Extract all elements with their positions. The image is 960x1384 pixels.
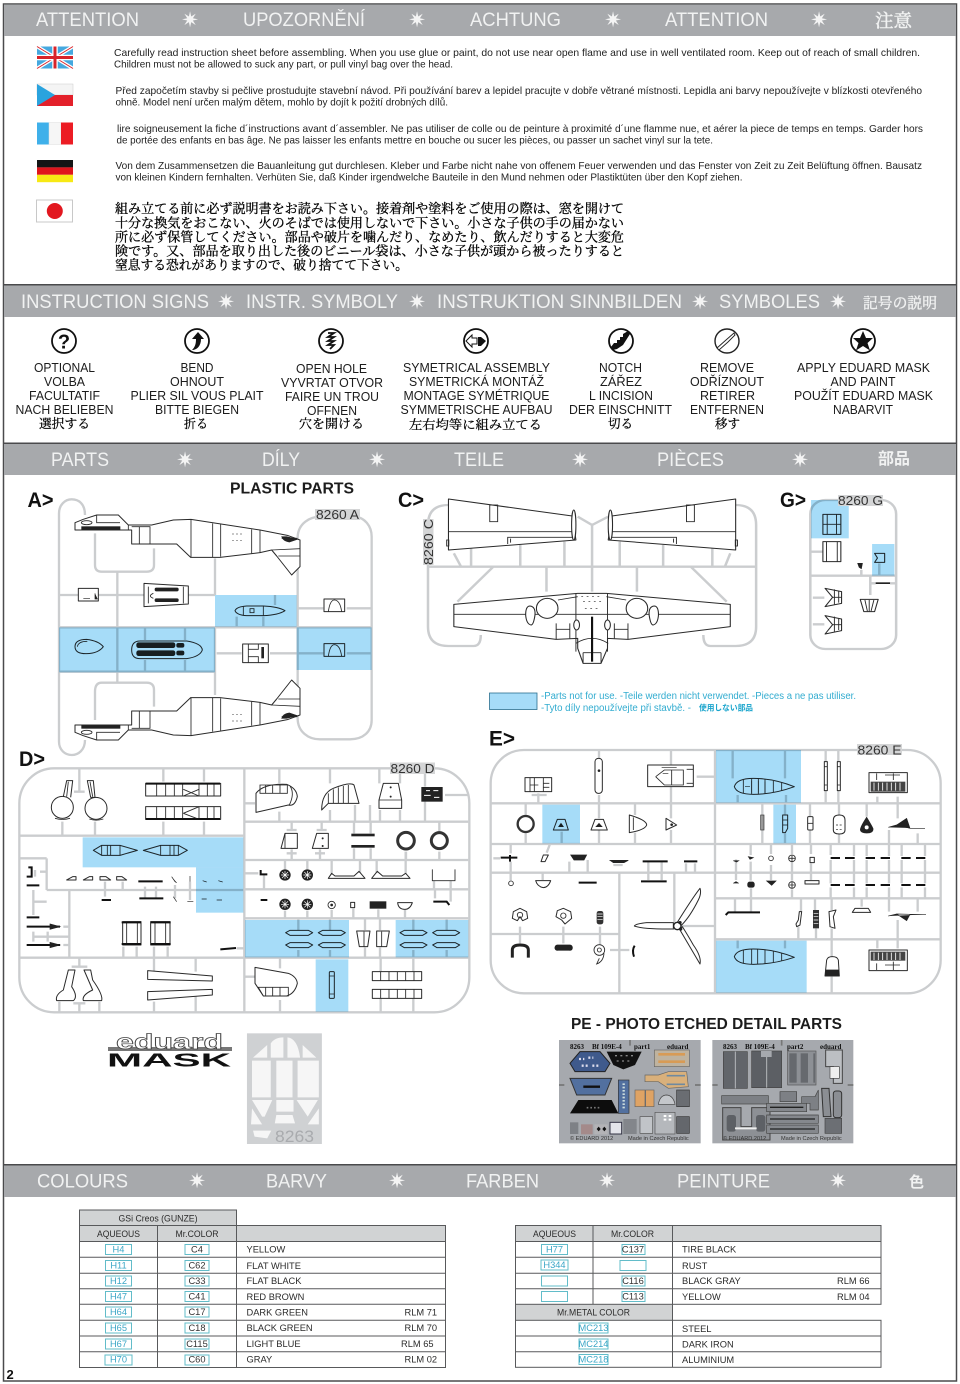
part: ring (518, 816, 534, 832)
fret 2 title: Bf 109E-4 (745, 1043, 775, 1051)
text block: French: de portée des enfants en bas âge. Ne pas laisser les enfants mettre en bouche ou sucer les pièces, ou passer un sachet vinyl sur la tete. (116, 136, 713, 146)
fret 2 footer: © EDUARD 2012 (723, 1135, 766, 1142)
text block: German: von kleinen Kindern fernhalten. Verhüten Sie, daß Kinder irgendwelche Bauteile in den Mund nehmen oder Plastiktüten über den Kopf ziehen. (116, 172, 742, 184)
icon: Czech flag (37, 84, 73, 106)
row: flat black (106, 1276, 302, 1286)
icon: question mark: ? (58, 332, 70, 354)
heading: colours band (4, 1164, 956, 1197)
sign: optional: NACH BELIEBEN (16, 402, 114, 417)
row: tire black (542, 1244, 737, 1254)
text block: Japanese: 窒息する恐れがありますので、破り捨てて下さい。 (115, 254, 408, 274)
sign: notch: 切る (608, 414, 633, 432)
sign: apply mask: NABARVIT (833, 402, 893, 417)
heading: attention band (4, 4, 956, 36)
sign: bend: PLIER SIL VOUS PLAIT (130, 388, 264, 403)
heading: parts band: TEILE (454, 450, 504, 471)
part: double bulb (555, 945, 572, 950)
logo: eduard mask: eduard (116, 1031, 223, 1054)
label: sprue G: G> (780, 489, 806, 512)
part: seat back (825, 957, 839, 976)
sign: remove: ODŘÍZNOUT (690, 374, 764, 389)
highlight: unused parts D (83, 837, 468, 1012)
heading: parts band: ✷ (571, 448, 589, 472)
table: paints left: AQUEOUS (97, 1229, 140, 1239)
label: 8260 E: 8260 E (858, 742, 902, 758)
icon: symmetry arrow (464, 329, 488, 353)
heading: parts band: PARTS (51, 450, 109, 471)
row: yellow: C113 (622, 1292, 644, 1302)
label: 8260 A: 8260 A (316, 507, 359, 522)
heading: attention band: ✷ (181, 8, 199, 32)
row: yellow (542, 1292, 870, 1302)
heading: colours band: ✷ (829, 1169, 847, 1193)
heading: parts band: ✷ (176, 448, 194, 472)
legend: parts not for use: 使用しない部品 (699, 702, 753, 714)
row: light blue (106, 1339, 434, 1349)
row: yellow: YELLOW (682, 1292, 721, 1302)
fret 1 title: Bf 109E-4 (592, 1043, 622, 1051)
heading: parts band: DÍLY (262, 450, 300, 471)
row: red brown: H47 (110, 1292, 127, 1302)
heading: photo etched parts: PE - PHOTO ETCHED DETAIL PARTS (571, 1016, 842, 1033)
part: small box (78, 588, 98, 601)
logo: eduard mask: MASK (107, 1050, 231, 1070)
photo etched fret 1 (559, 1040, 701, 1143)
diagram: sprue A (59, 499, 372, 755)
row: black gray: BLACK GRAY (682, 1276, 741, 1286)
label: 8260 D: 8260 D (390, 761, 434, 776)
part: small items left (27, 867, 223, 948)
part: rudder upper (256, 784, 297, 812)
part: seat left (51, 781, 73, 819)
sign: apply mask: POUŽÍT EDUARD MASK (794, 388, 933, 403)
part: small items right (261, 869, 455, 909)
text block: English: Children must not be allowed to suck any part, or pull vinyl bag over the head. (114, 60, 453, 70)
part: oval (75, 639, 103, 654)
row: black green: H65 (110, 1323, 127, 1333)
row: tire black: TIRE BLACK (682, 1244, 737, 1254)
row: flat black: FLAT BLACK (246, 1276, 302, 1286)
row: yellow: RLM 04 (837, 1292, 870, 1302)
heading: parts band: 部品 (878, 445, 910, 469)
icon: star (851, 329, 875, 353)
text block: Japanese: 険です。又、部品を取り出した後のビニール袋は、小さな子供が頭から被ったりすると (115, 240, 624, 260)
part: rods (824, 762, 840, 791)
part: nine-shaped (594, 945, 605, 964)
heading: instruction signs band (4, 284, 956, 317)
row: rust: RUST (682, 1261, 708, 1271)
row: flat white: FLAT WHITE (246, 1261, 301, 1271)
row: steel: STEEL (682, 1324, 711, 1334)
table: paints left: GSi Creos (GUNZE) (118, 1214, 198, 1224)
part: exhaust block (144, 583, 188, 607)
sign: remove: ENTFERNEN (690, 402, 764, 417)
part: dashes (831, 858, 925, 885)
part: row two right (761, 815, 925, 834)
panel: instruction signs (4, 284, 956, 433)
part: curved panel (322, 784, 359, 810)
part: upper fuselage (75, 515, 300, 575)
mask sheet: 8263 (275, 1127, 314, 1146)
label: sprue D: D> (19, 748, 45, 771)
row: gray (105, 1354, 437, 1365)
label: sprue A: A> (28, 489, 54, 512)
fret 1 footer: © EDUARD 2012 (570, 1135, 613, 1142)
sign: symmetrical assembly: MONTAGE SYMÉTRIQUE (404, 388, 550, 403)
sign: symmetrical assembly (400, 329, 552, 433)
heading: instruction signs band: ✷ (217, 290, 235, 314)
sign: remove: RETIRER (700, 388, 755, 403)
fret 2 title: 8263 (723, 1043, 738, 1051)
row: red brown: RED BROWN (246, 1292, 304, 1302)
row: dark green: DARK GREEN (246, 1308, 308, 1318)
row: metal heading: Mr.METAL COLOR (557, 1308, 630, 1318)
sign: notch: NOTCH (599, 360, 642, 375)
panel: attention (4, 4, 956, 274)
row: light blue: RLM 65 (401, 1339, 434, 1349)
part: blue tube (329, 972, 334, 998)
sign: optional: OPTIONAL (34, 360, 95, 375)
heading: attention band: ✷ (810, 8, 828, 32)
part: wheels (279, 869, 313, 910)
legend: parts not for use: -Tyto díly nepoužívejte při stavbě. - (541, 703, 691, 714)
row: aluminium (579, 1354, 734, 1365)
sign: open hole: 穴を開ける (299, 414, 364, 432)
part: black bar (876, 583, 890, 584)
heading: instruction signs band: INSTRUKTION SINNBILDEN (437, 292, 682, 313)
photo etched fret 2 (712, 1040, 853, 1143)
icon: drill (319, 329, 343, 353)
logo: eduard mask (107, 1031, 232, 1070)
row: flat white: H11 (110, 1260, 127, 1270)
sign: open hole (281, 329, 383, 432)
sign: remove (690, 329, 764, 432)
heading: colours band: PEINTURE (677, 1172, 770, 1192)
diagram: sprue C (428, 499, 896, 663)
table: paints left (80, 1210, 446, 1368)
heading: colours band: ✷ (388, 1169, 406, 1193)
heading: attention band: ATTENTION (36, 10, 139, 31)
row: yellow (106, 1244, 285, 1254)
diagram: sprue G (810, 500, 896, 649)
part: wing spar upper (146, 783, 221, 796)
icon: bend arrow (185, 329, 209, 353)
part: D shapes (629, 815, 677, 833)
part: lower fuselage (75, 680, 300, 740)
fret 2 title: eduard (820, 1043, 842, 1051)
sign: open hole: OPEN HOLE (296, 361, 367, 376)
row: yellow: H4 (113, 1244, 124, 1254)
sign: notch (569, 329, 672, 432)
sign: apply mask: AND PAINT (830, 374, 896, 389)
sign: symmetrical assembly: SYMETRICKÁ MONTÁŽ (409, 374, 544, 389)
row: tire black: C137 (622, 1244, 644, 1254)
sign: optional: VOLBA (44, 374, 85, 389)
icon: UK flag (37, 46, 73, 68)
table: paints left: Mr.COLOR (176, 1229, 219, 1239)
part: bracket (633, 946, 635, 957)
part: right wing upper (608, 499, 737, 550)
row: steel (579, 1323, 711, 1334)
sign: optional: 選択する (39, 414, 90, 432)
text block: English: Carefully read instruction sheet before assembling. When you use glue or paint, do not use near open flame and use in well ventilated room. Keep out of reach of small children. (114, 48, 920, 59)
row: gray: GRAY (246, 1354, 272, 1364)
part: tapered pieces (357, 931, 389, 947)
row: gray: RLM 02 (404, 1354, 437, 1364)
text block: Japanese: 組み立てる前に必ず説明書をお読み下さい。接着剤や塗料をご使用の際は、窓を開けて (115, 198, 624, 217)
part: lower wing (454, 593, 730, 663)
part: spinner blue (734, 778, 794, 794)
part: lower seats (56, 970, 102, 1001)
part: row five right (726, 908, 926, 928)
sign: bend: BEND (180, 360, 214, 375)
row: dark green: RLM 71 (404, 1308, 437, 1318)
part: panel with dots (379, 783, 402, 808)
row: yellow: C4 (191, 1244, 203, 1254)
row: dark iron: MC214 (579, 1339, 608, 1349)
text block: Czech: ohně. Model není určen malým dětem, mohlo by dojít k požití drobných dílů. (116, 96, 448, 108)
row: red brown: C41 (188, 1292, 206, 1302)
sign: symmetrical assembly: SYMMETRISCHE AUFBAU (400, 402, 552, 417)
icon: French flag (37, 122, 73, 144)
sign: bend: BITTE BIEGEN (155, 402, 239, 417)
sign: symmetrical assembly: SYMETRICAL ASSEMBLY (403, 360, 550, 375)
heading: attention band: ACHTUNG (470, 10, 561, 31)
part: blue noses (93, 845, 187, 855)
panel: colours (4, 1164, 956, 1368)
heading: instruction signs band: 記号の説明 (863, 292, 937, 313)
fret 1 title: part1 (634, 1043, 651, 1051)
diagram: sprue E (491, 750, 941, 993)
row: black green: RLM 70 (404, 1323, 437, 1333)
fret 1 title: 8263 (570, 1043, 584, 1051)
icon: notch (609, 329, 633, 353)
sign: open hole: OFFNEN (307, 403, 357, 418)
part: spinner lower (734, 949, 794, 964)
part: engine lower (869, 950, 907, 971)
row: dark green (106, 1307, 437, 1318)
fret 1 footer: Made in Czech Republic (628, 1136, 689, 1142)
heading: attention band: UPOZORNĚNÍ (243, 9, 366, 31)
heading: instruction signs band: SYMBOLES (719, 292, 820, 313)
part: basket (860, 599, 878, 612)
label: 8260 C: 8260 C (421, 519, 436, 565)
legend: parts not for use: -Parts not for use. -Teile werden nicht verwendet. -Pieces a ne pas utiliser. (541, 691, 856, 702)
heading: colours band: FARBEN (466, 1172, 539, 1192)
text block: Czech (116, 86, 922, 108)
part: black bars (352, 834, 374, 847)
part: rod (220, 948, 236, 949)
part: arch upper (324, 599, 345, 612)
diagram: sprue D (19, 768, 469, 1012)
highlight: unused parts A (59, 595, 372, 672)
part: engine cover (132, 641, 202, 659)
icon: knife (715, 329, 739, 353)
row: light blue: LIGHT BLUE (246, 1339, 301, 1349)
part: small items right (733, 855, 819, 888)
table: paints right (516, 1226, 881, 1368)
sign: notch: L INCISION (589, 388, 653, 403)
icon: German flag (37, 160, 73, 182)
row: aluminium: MC218 (579, 1354, 608, 1364)
heading: colours band: ✷ (188, 1169, 206, 1193)
part: seat right (85, 781, 107, 820)
part: grid window (823, 514, 841, 534)
sign: open hole: VYVRTAT OTVOR (281, 375, 383, 390)
row: flat white (106, 1260, 301, 1271)
part: horseshoe (512, 945, 528, 958)
heading: colours band: BARVY (266, 1172, 327, 1192)
row: flat black: C33 (188, 1276, 206, 1286)
heading: instruction signs band: ✷ (408, 290, 426, 314)
row: dark green: C17 (188, 1307, 206, 1317)
mask sheet (247, 1033, 322, 1146)
part: small items left (501, 855, 697, 888)
sign: bend: 折る (184, 414, 208, 432)
panel: parts (4, 442, 956, 1146)
sign: apply mask (794, 329, 933, 417)
table: paints right: AQUEOUS (533, 1229, 576, 1239)
part: clover parts (512, 908, 603, 924)
part: ladders (372, 972, 422, 998)
part: engine upper (869, 773, 907, 793)
part: left wing upper (447, 499, 576, 550)
text block: Japanese: 十分な換気をおこない、火のそばでは使用しないで下さい。小さな子供の手の届かない (115, 212, 624, 232)
fret 2 footer: Made in Czech Republic (781, 1136, 842, 1142)
row: dark iron (579, 1339, 734, 1350)
highlight: unused parts G (811, 500, 894, 576)
row: gray: H70 (110, 1354, 127, 1364)
heading: attention band: ✷ (604, 8, 622, 32)
part: cockpit floor (648, 765, 693, 787)
part: pill (595, 758, 602, 793)
sign: symmetrical assembly: 左右均等に組み立てる (409, 415, 542, 433)
row: rust (541, 1260, 708, 1271)
heading: parts band (4, 442, 956, 475)
heading: instruction signs band: ✷ (829, 290, 847, 314)
heading: attention band: ATTENTION (665, 10, 768, 31)
sign: remove: 移す (715, 414, 740, 432)
legend: parts not for use (490, 691, 856, 714)
heading: plastic parts: PLASTIC PARTS (230, 480, 354, 498)
row: flat white: C62 (188, 1260, 206, 1270)
sign: notch: DER EINSCHNITT (569, 402, 672, 417)
row: tire black: H77 (546, 1244, 563, 1254)
part: bracket lower (825, 616, 842, 634)
row: black gray: C116 (622, 1276, 644, 1286)
heading: attention band: ✷ (408, 8, 426, 32)
text block: English (114, 48, 920, 70)
row: light blue: H67 (110, 1339, 127, 1349)
part: window frame (823, 542, 841, 562)
sign: optional: FACULTATIF (29, 388, 100, 403)
heading: colours band: 色 (909, 1171, 924, 1192)
sign: bend: OHNOUT (170, 374, 224, 389)
text block: Czech: Před započetím stavby si pečlive prostudujte stavební návod. Při používání barev a lepidel pracujte v dobře větrané místnosti. Lepidla ani barvy nepoužívejte v blízkosti otevřeného (116, 86, 922, 97)
sign: bend (130, 329, 264, 432)
label: sprue E: E> (489, 728, 515, 750)
heading: attention band: 注意 (875, 7, 913, 33)
sign: apply mask: APPLY EDUARD MASK (797, 360, 930, 375)
heading: parts band: PIÈCES (657, 450, 724, 471)
part: wing spar lower (146, 807, 221, 819)
text block: German (116, 161, 922, 184)
fret 1 title: eduard (667, 1043, 688, 1051)
table: paints right: Mr.COLOR (611, 1229, 654, 1239)
text block: Japanese (115, 198, 624, 274)
sign: optional (16, 329, 114, 432)
row: dark iron: DARK IRON (682, 1340, 734, 1350)
heading: colours band: ✷ (598, 1169, 616, 1193)
part: trapezoids (553, 819, 607, 830)
part: wedges (148, 971, 212, 1000)
part: seat bracket (243, 644, 268, 663)
sign: notch: ZÁŘEZ (600, 374, 642, 389)
page number: 2 (6, 1367, 14, 1382)
part: bracket upper (825, 588, 842, 607)
heading: instruction signs band: INSTRUCTION SIGNS (21, 292, 209, 313)
text block: Japanese: 所に必ず保管してください。部品や破片を噛んだり、なめたり、飲んだりすると大変危 (115, 226, 624, 246)
row: black green: C18 (188, 1323, 206, 1333)
row: steel: MC213 (579, 1323, 608, 1333)
label: sprue C: C> (398, 489, 424, 512)
heading: instruction signs band: ✷ (691, 290, 709, 314)
heading: instruction signs band: INSTR. SYMBOLY (246, 292, 398, 313)
row: rust: H344 (543, 1260, 566, 1270)
row: red brown (106, 1292, 304, 1302)
highlight: unused parts E (542, 750, 807, 993)
fret 2 title: part2 (787, 1043, 804, 1051)
row: yellow: YELLOW (246, 1244, 285, 1254)
icon: Japanese flag (36, 200, 72, 222)
text block: French (116, 123, 923, 146)
heading: parts band: ✷ (791, 448, 809, 472)
part: propeller (634, 888, 701, 964)
row: black gray: RLM 66 (837, 1276, 870, 1286)
part: doors (122, 922, 171, 945)
row: black green: BLACK GREEN (246, 1323, 313, 1333)
heading: parts band: ✷ (368, 448, 386, 472)
text block: French: lire soigneusement la fiche d´instructions avant d´assembler. Ne pas utiliser de colle ou de peinture à proximité d´une flamme nue, et aérer la piece de temps en temps. Garder hors (117, 123, 923, 135)
part: arch lower (324, 644, 345, 656)
row: aluminium: ALUMINIUM (682, 1355, 734, 1365)
part: small tab (875, 553, 885, 562)
part: blue bomb half (235, 606, 285, 616)
part: flap pieces (281, 833, 328, 848)
part: dark frame (422, 787, 442, 801)
row: light blue: C115 (186, 1339, 208, 1349)
text block: German: Von dem Zusammensetzen die Bauanleitung gut durchlesen. Kleber und Farbe nicht nahe von offenem Feuer verwenden und das Fenster von Zeit zu Zeit Belüftung öffnen. Bausatz (116, 161, 922, 172)
part: tiny black (858, 563, 862, 569)
sign: remove: REMOVE (700, 360, 754, 375)
part: blue pills (286, 930, 460, 948)
part: small panel (525, 778, 552, 792)
row: dark green: H64 (110, 1307, 127, 1317)
part: rudder lower (255, 967, 297, 996)
part: tires (398, 832, 447, 849)
row: black gray (542, 1276, 870, 1286)
label: 8260 G: 8260 G (838, 493, 883, 508)
row: flat black: H12 (110, 1276, 127, 1286)
sign: open hole: FAIRE UN TROU (285, 389, 379, 404)
heading: colours band: COLOURS (37, 1172, 128, 1192)
row: gray: C60 (188, 1354, 206, 1364)
row: black green (106, 1323, 437, 1333)
